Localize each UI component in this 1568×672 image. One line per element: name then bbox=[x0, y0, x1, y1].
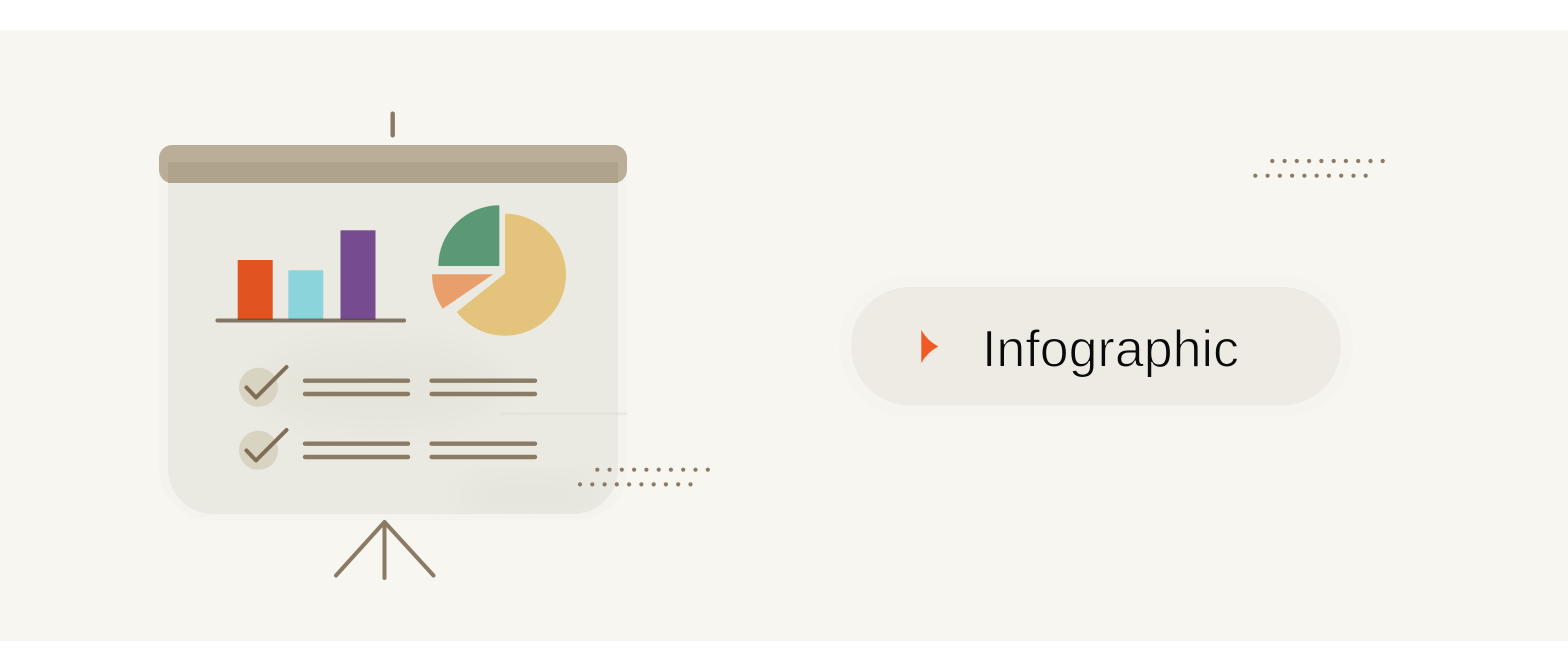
bar: red bbox=[238, 260, 273, 320]
bar: cyan bbox=[288, 270, 323, 320]
roller bar bbox=[159, 145, 627, 183]
bar: purple bbox=[340, 230, 376, 320]
check mark bbox=[246, 367, 286, 398]
dotted accent: upper right bbox=[1253, 159, 1385, 178]
title text: Infographic bbox=[982, 321, 1239, 379]
pie slice: green bbox=[438, 205, 499, 266]
pie slice: orange bbox=[432, 274, 493, 309]
check badge bbox=[239, 368, 278, 407]
board hanger bbox=[390, 112, 395, 138]
pie slice: yellow bbox=[457, 214, 566, 336]
tripod stand bbox=[336, 522, 434, 578]
check mark bbox=[246, 430, 286, 460]
text lines bbox=[305, 381, 535, 394]
presentation board bbox=[159, 112, 627, 578]
checklist row 2 bbox=[239, 430, 535, 470]
pill body bbox=[851, 287, 1341, 406]
text lines bbox=[305, 444, 535, 457]
pill halo bbox=[839, 276, 1353, 417]
bar chart bbox=[216, 230, 406, 322]
chart axis bbox=[216, 318, 406, 322]
check badge bbox=[239, 431, 278, 470]
title pill bbox=[839, 276, 1353, 417]
pie chart bbox=[432, 205, 566, 336]
screen bbox=[168, 183, 627, 514]
checklist row 1 bbox=[239, 367, 535, 407]
icon: orange arrow marker bbox=[921, 330, 938, 363]
screen halo bbox=[159, 170, 627, 520]
dotted accent: lower left bbox=[578, 468, 710, 486]
